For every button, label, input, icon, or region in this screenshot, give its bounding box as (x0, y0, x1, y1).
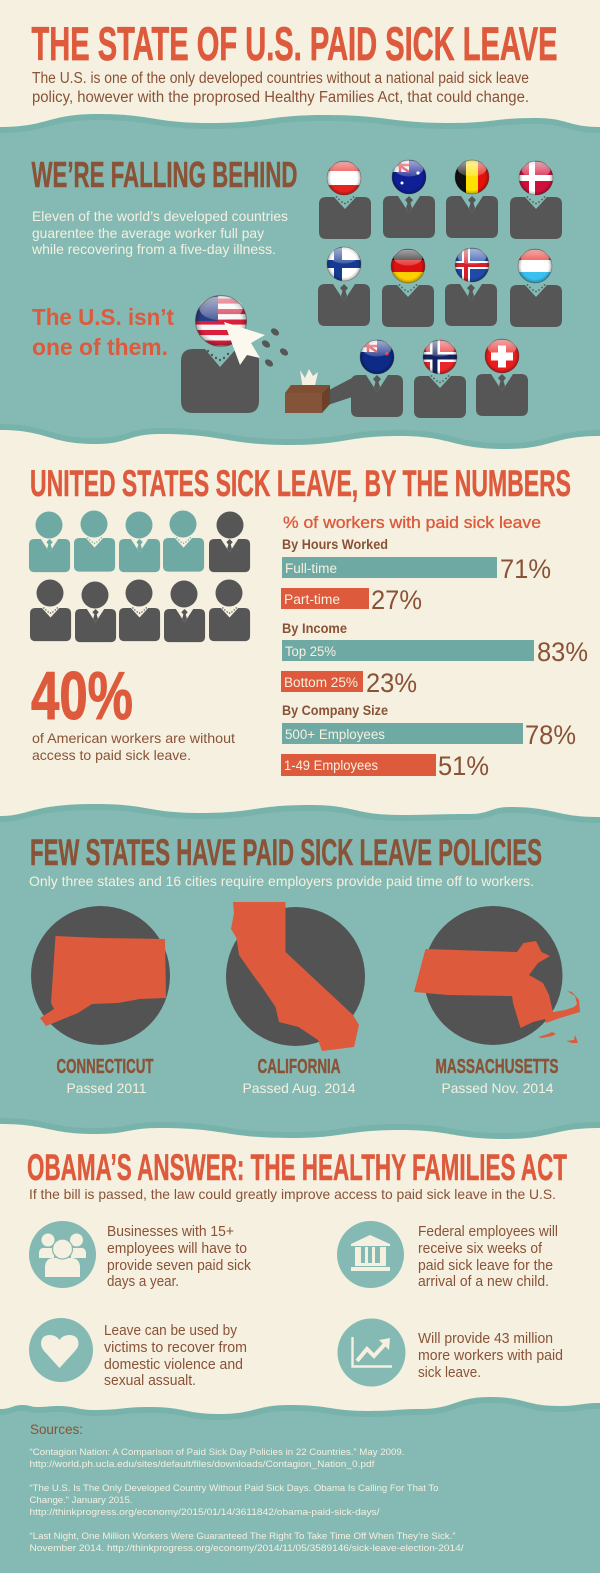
item: domestic violence: sexual assualt. (104, 1373, 196, 1389)
bar: 500+ employees: 78% (525, 720, 576, 750)
worker 4 (163, 510, 204, 572)
source list: http://world.ph.ucla.edu/sites/default/files/downloads/Contagion_Nation_0.pdf (30, 1459, 375, 1470)
bar: part-time: Part-time (284, 592, 340, 607)
item: domestic violence: victims to recover from (104, 1340, 247, 1356)
state: Connecticut (31, 906, 170, 1096)
icon: heart (29, 1318, 93, 1382)
icon: government building (337, 1221, 404, 1288)
person: New Zealand, dropping a paper in the box (328, 340, 403, 417)
heading: falling behind: WE’RE FALLING BEHIND (32, 154, 298, 195)
item: domestic violence: Leave can be used by (104, 1323, 238, 1339)
text: without access: access to paid sick leave. (32, 747, 191, 763)
intro text: policy, however with the proprosed Healthy Families Act, that could change. (32, 89, 529, 106)
bar: 1-49 employees: 1-49 Employees (284, 758, 378, 773)
callout: the U.S. isn't one of them (32, 304, 174, 360)
worker 9 (164, 580, 205, 642)
state: Connecticut: Passed 2011 (66, 1080, 147, 1096)
panel: falling behind (0, 114, 600, 449)
text: eleven countries (31, 208, 288, 257)
source list: November 2014. http://thinkprogress.org/economy/2014/11/05/3589146/sick-leave-election-2014/ (30, 1543, 464, 1554)
bar: 1-49 employees: 51% (438, 751, 489, 781)
worker 1 (29, 512, 70, 572)
source list: “Contagion Nation: A Comparison of Paid Sick Day Policies in 22 Countries.” May 2009. (30, 1447, 404, 1458)
bar: top 25%: Top 25% (285, 644, 336, 659)
person: Norway (414, 340, 466, 418)
text: eleven countries: guarentee the average worker full pay (32, 225, 264, 241)
text: eleven countries: while recovering from a five-day illness. (31, 241, 276, 257)
item: 43 million workers: sick leave. (418, 1365, 481, 1381)
state: California: CALIFORNIA (258, 1055, 341, 1078)
pictogram: workers, 4 of 10 highlighted (29, 510, 250, 642)
icon: people (29, 1221, 96, 1288)
group label: hours: By Hours Worked (282, 537, 388, 552)
person: Denmark (510, 161, 562, 239)
person: Germany (382, 249, 434, 327)
item: 43 million workers: more workers with paid (418, 1348, 563, 1364)
item: businesses: provide seven paid sick (107, 1258, 252, 1274)
person: Austria (319, 161, 371, 239)
bar: 500+ employees: 500+ Employees (285, 727, 385, 742)
item: businesses: Businesses with 15+ (107, 1224, 234, 1240)
chart: percent of workers with paid sick leave (281, 513, 588, 781)
item: businesses: days a year. (107, 1274, 179, 1290)
item: 43 million workers (338, 1318, 563, 1386)
person: Iceland (445, 248, 497, 326)
item: federal employees: arrival of a new child. (418, 1274, 549, 1290)
source list: “The U.S. Is The Only Developed Country Without Paid Sick Days. Obama Is Calling For That To (30, 1483, 438, 1494)
worker 8 (119, 580, 160, 641)
worker 10 (209, 580, 250, 641)
bar: 500+ employees (282, 720, 576, 750)
chart title: % of workers with paid sick leave (283, 513, 541, 532)
icon: ballot box (285, 369, 330, 413)
person: United States, crossed out by cursor (181, 296, 259, 413)
text: without access: of American workers are without (32, 730, 235, 746)
person: Finland (318, 247, 370, 326)
bar: full-time: 71% (500, 554, 551, 584)
item: federal employees: Federal employees will (418, 1224, 558, 1240)
bar: 1-49 employees (281, 751, 489, 781)
bar: bottom 25%: 23% (366, 668, 417, 698)
text: if the bill is passed: If the bill is passed, the law could greatly improve access to paid sick leave in the U.S. (29, 1186, 556, 1202)
icon: cursor arrow (224, 322, 265, 365)
worker 6 (30, 580, 71, 641)
bar: part-time (281, 585, 422, 615)
item: businesses: employees will have to (107, 1241, 247, 1257)
state: California (226, 902, 365, 1096)
source list: Change.” January 2015. (30, 1495, 132, 1506)
source list: http://thinkprogress.org/economy/2015/01/14/3611842/obama-paid-sick-days/ (30, 1507, 380, 1518)
bar: bottom 25% (281, 668, 417, 698)
bar: top 25%: 83% (537, 637, 588, 667)
text: three states: Only three states and 16 cities require employers provide paid time off to workers. (29, 873, 534, 889)
icon: flying droplets (261, 327, 289, 368)
item: domestic violence (29, 1318, 247, 1389)
worker 2 (74, 510, 115, 572)
source list (30, 1447, 464, 1554)
intro text: The U.S. is one of the only developed countries without a national paid sick leave (32, 70, 529, 87)
group label: income: By Income (282, 621, 347, 636)
source list: “Last Night, One Million Workers Were Guaranteed The Right To Take Time Off When They’re Sick.” (30, 1531, 456, 1542)
text: without access (32, 730, 235, 763)
item: domestic violence: domestic violence and (104, 1357, 243, 1373)
worker 7 (75, 582, 116, 642)
state: Massachusetts (414, 906, 580, 1096)
bar: bottom 25%: Bottom 25% (284, 675, 358, 690)
person: Australia (383, 160, 435, 238)
worker 5 (209, 512, 250, 572)
panel: sources (0, 1397, 600, 1573)
person: Switzerland (476, 339, 528, 416)
bar: full-time: Full-time (285, 561, 337, 576)
panel: state policies (0, 804, 600, 1139)
text: eleven countries: Eleven of the world’s developed countries (32, 208, 288, 224)
bar: full-time (282, 554, 551, 584)
intro text (32, 70, 529, 106)
bar: part-time: 27% (371, 585, 422, 615)
big number: 40%: 40% (31, 658, 133, 734)
icon: rising chart (338, 1318, 406, 1386)
item: businesses (29, 1221, 252, 1290)
person: Belgium (446, 160, 498, 238)
state: California: Passed Aug. 2014 (242, 1080, 356, 1096)
callout: the U.S. isn't one of them: The U.S. isn’t (32, 304, 174, 330)
person: Luxembourg (510, 249, 562, 327)
worker 3 (119, 512, 160, 572)
bar: top 25% (282, 637, 588, 667)
state: Massachusetts: Passed Nov. 2014 (442, 1080, 554, 1096)
item: federal employees: paid sick leave for the (418, 1258, 553, 1274)
callout: the U.S. isn't one of them: one of them. (32, 334, 168, 360)
state: Connecticut: CONNECTICUT (56, 1055, 154, 1078)
item: federal employees: receive six weeks of (418, 1241, 543, 1257)
group label: company size: By Company Size (282, 703, 388, 718)
heading: sources: Sources: (30, 1421, 83, 1437)
item: 43 million workers: Will provide 43 million (418, 1331, 553, 1347)
item: federal employees (337, 1221, 558, 1290)
